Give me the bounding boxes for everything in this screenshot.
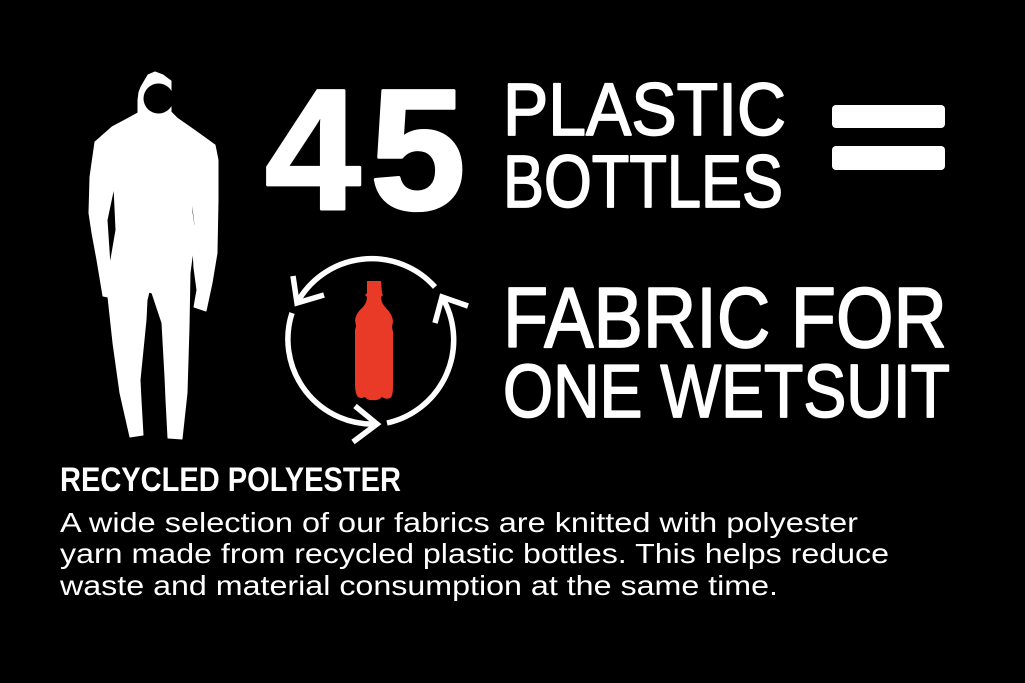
equals sign: [832, 105, 945, 170]
body text: waste and material consumption at the same time.: [59, 570, 778, 601]
body text: A wide selection of our fabrics are knitted with polyester: [60, 507, 858, 538]
icon: red plastic bottle: [355, 281, 393, 400]
heading: fabric for one wetsuit: [503, 271, 950, 433]
number 45: 45: [265, 54, 466, 246]
heading: fabric for one wetsuit: FABRIC FOR: [503, 271, 947, 366]
heading: plastic bottles: PLASTIC: [503, 68, 786, 151]
icon: wetsuit silhouette: [89, 72, 218, 439]
heading: plastic bottles: BOTTLES: [503, 140, 783, 223]
icon: recycling arrows: [288, 259, 468, 442]
heading: fabric for one wetsuit: ONE WETSUIT: [503, 349, 950, 433]
body text: yarn made from recycled plastic bottles. This helps reduce: [60, 538, 889, 569]
heading: plastic bottles: [503, 68, 786, 223]
subheading: recycled polyester: RECYCLED POLYESTER: [60, 461, 401, 499]
body text: [59, 507, 889, 601]
